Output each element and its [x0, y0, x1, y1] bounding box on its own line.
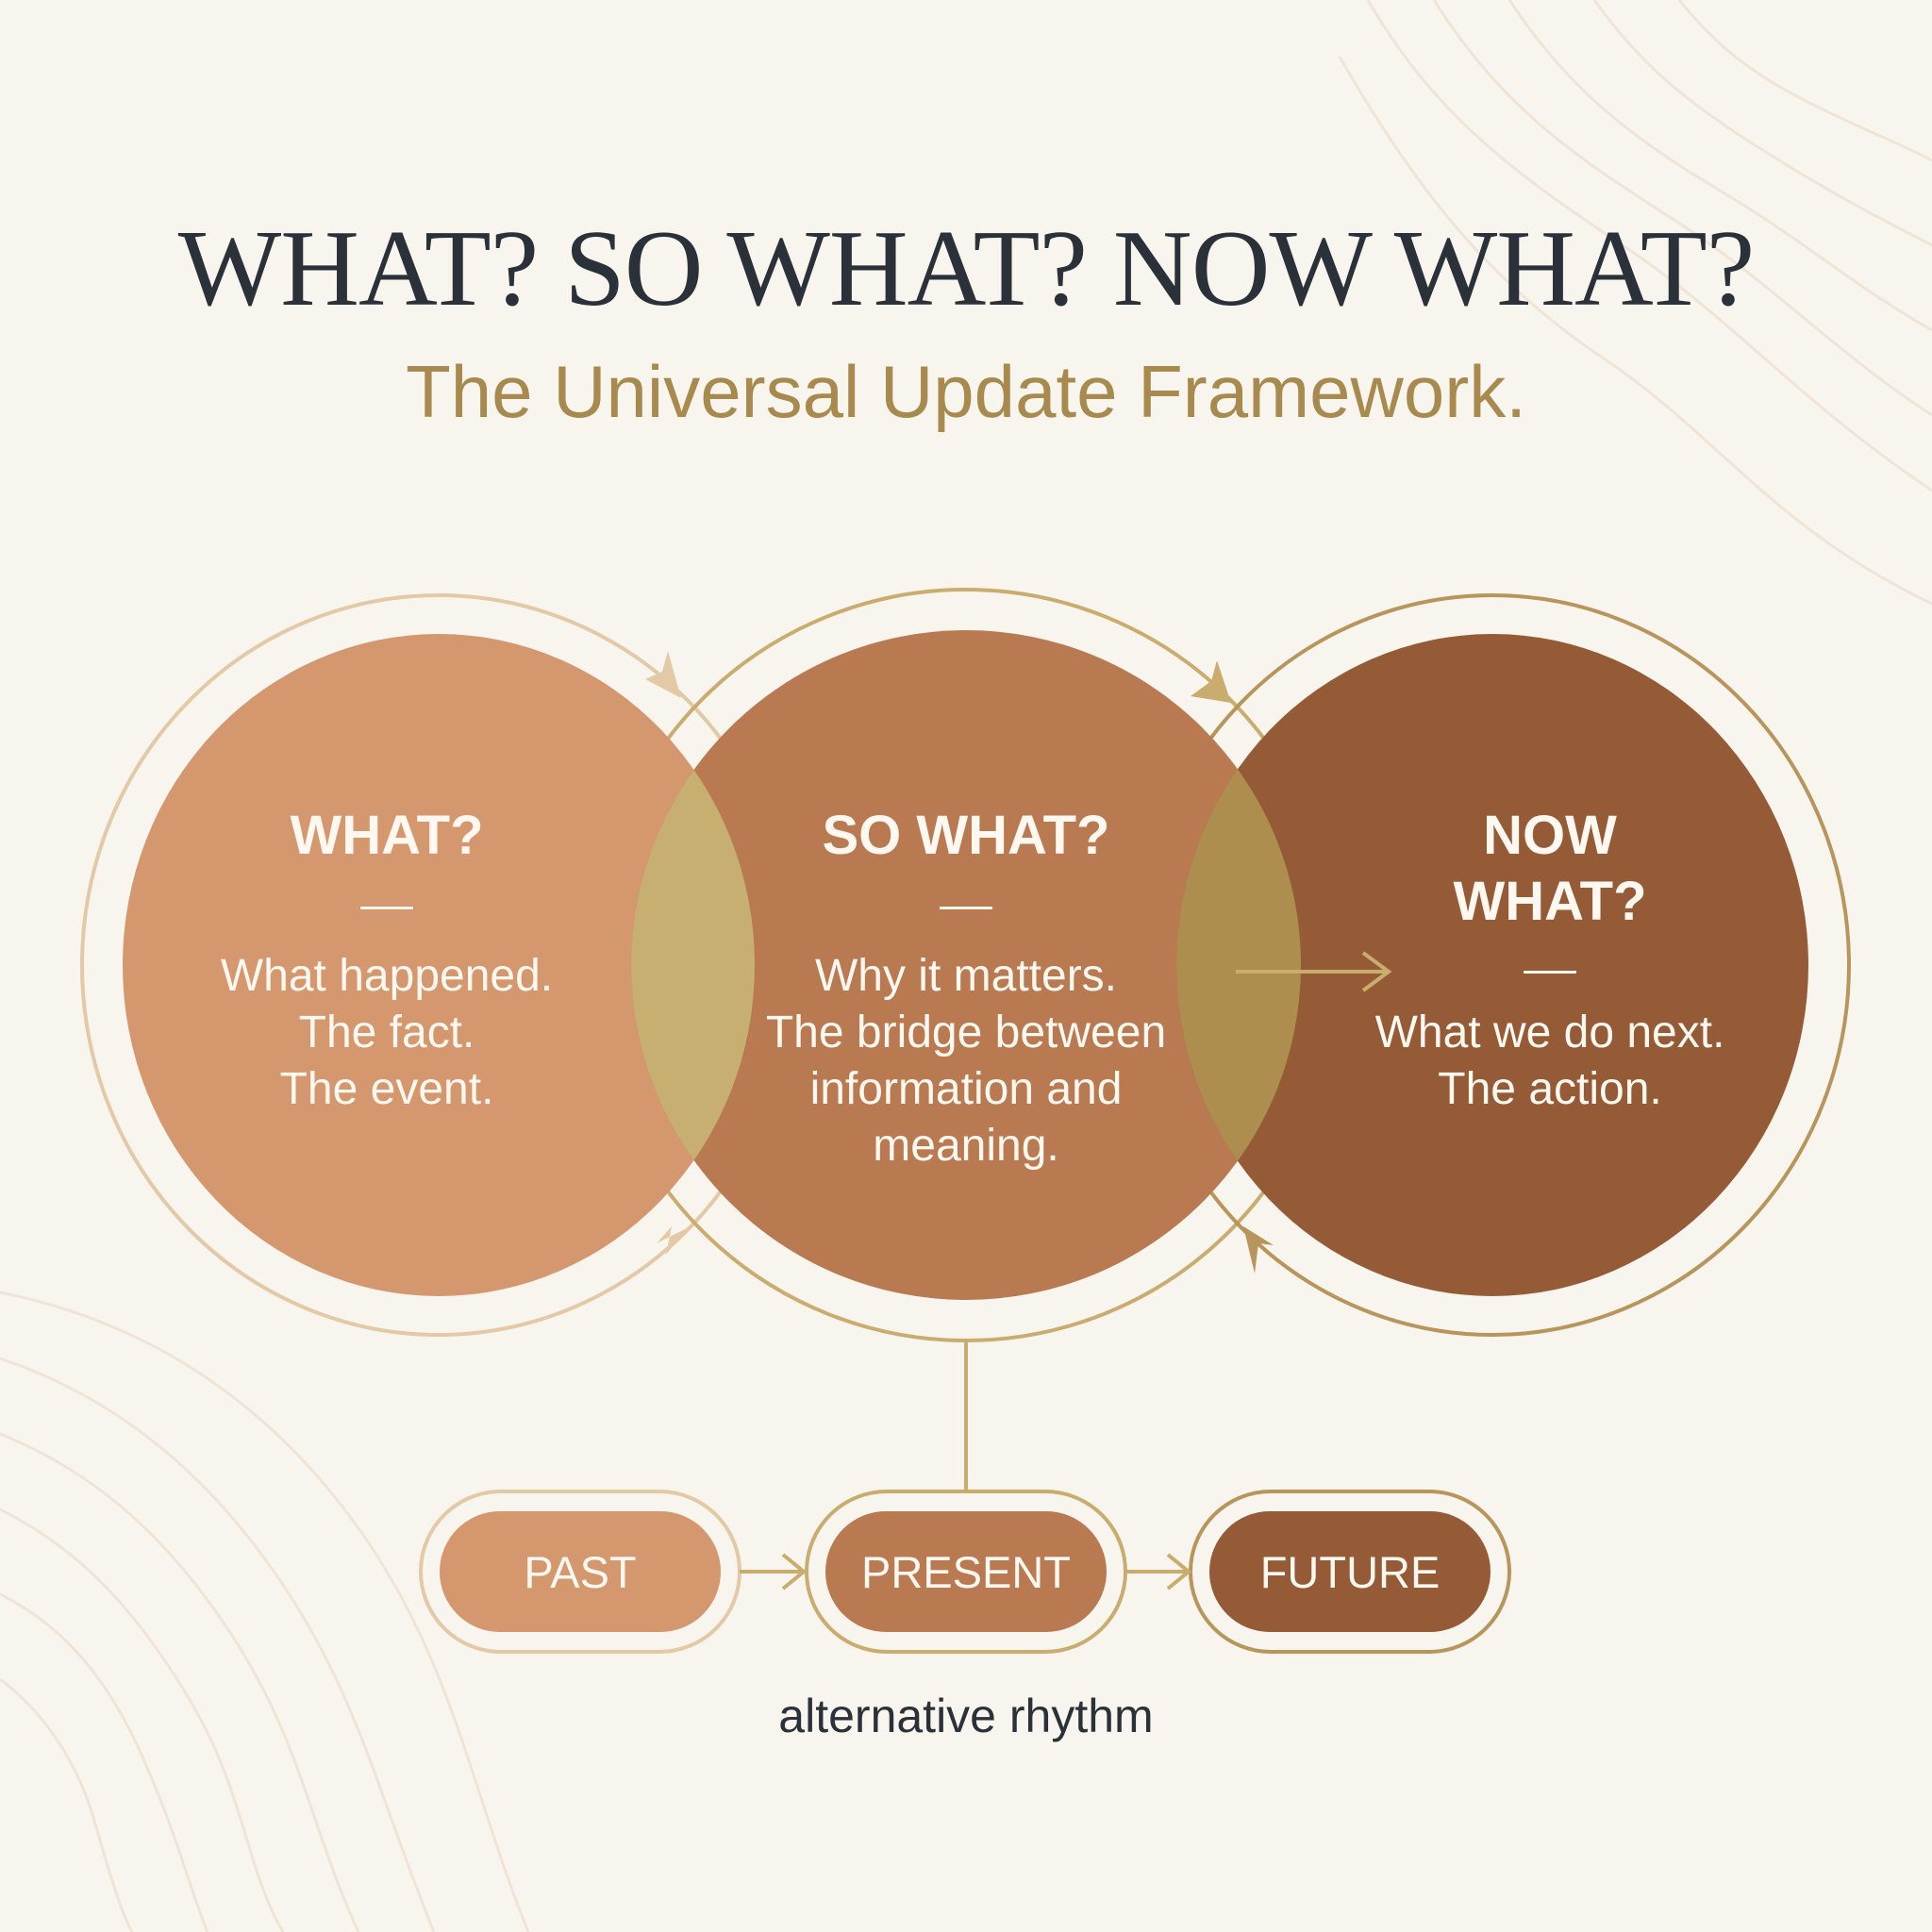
- overlap left: [631, 770, 755, 1160]
- pill: future: FUTURE: [1260, 1547, 1440, 1597]
- text: what: [221, 805, 553, 1114]
- title: WHAT? SO WHAT? NOW WHAT?: [178, 208, 1754, 329]
- pill: present: PRESENT: [861, 1547, 1071, 1597]
- text: so what: SO WHAT?: [823, 805, 1109, 866]
- overlap right: [1176, 770, 1301, 1160]
- circle: what: [123, 634, 755, 1296]
- text: what: The fact.: [299, 1008, 475, 1058]
- pill: past: PAST: [524, 1547, 637, 1597]
- arrows between pills: [740, 1555, 1189, 1589]
- text: now what: The action.: [1438, 1064, 1662, 1114]
- pill: past: [421, 1491, 740, 1652]
- text: so what: [766, 805, 1166, 1171]
- pill: future: [1191, 1491, 1509, 1652]
- text: so what: Why it matters.: [815, 951, 1117, 1001]
- text: now what: What we do next.: [1375, 1008, 1724, 1058]
- text: what: WHAT?: [290, 805, 484, 866]
- arrowheads on rings: [645, 651, 1274, 1274]
- connector line: [964, 1341, 968, 1492]
- text: what: The event.: [280, 1064, 493, 1114]
- circle: now what: [1176, 634, 1808, 1296]
- subtitle: The Universal Update Framework.: [406, 350, 1526, 433]
- text: so what: The bridge between: [766, 1008, 1166, 1058]
- text: so what: information and: [810, 1064, 1122, 1114]
- text: what: What happened.: [221, 951, 553, 1001]
- text: now what: [1375, 805, 1724, 1114]
- text: so what: meaning.: [873, 1121, 1059, 1171]
- arrow: into center: [1236, 953, 1389, 991]
- pill: present: [807, 1491, 1125, 1652]
- footer label: alternative rhythm: [778, 1690, 1154, 1742]
- text: now what: WHAT?: [1453, 871, 1647, 932]
- timeline pills: [421, 1491, 1509, 1652]
- venn diagram: [82, 590, 1849, 1341]
- text: now what: NOW: [1483, 805, 1617, 866]
- outer rings: [82, 590, 1849, 1341]
- circle: so what: [631, 630, 1301, 1300]
